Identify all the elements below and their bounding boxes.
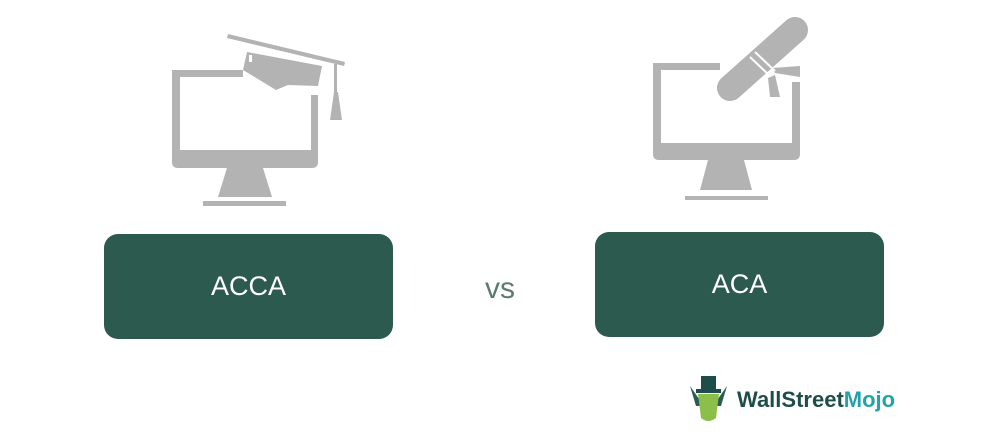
logo: WallStreetMojo <box>690 376 895 421</box>
box: ACCA: ACCA <box>211 271 286 301</box>
logo: WallStreetMojo: WallStreetMojo <box>737 387 895 412</box>
box: ACCA <box>104 234 393 339</box>
box: ACA: ACA <box>712 269 767 299</box>
box: ACA <box>595 232 884 337</box>
text: vs: vs <box>485 272 515 305</box>
